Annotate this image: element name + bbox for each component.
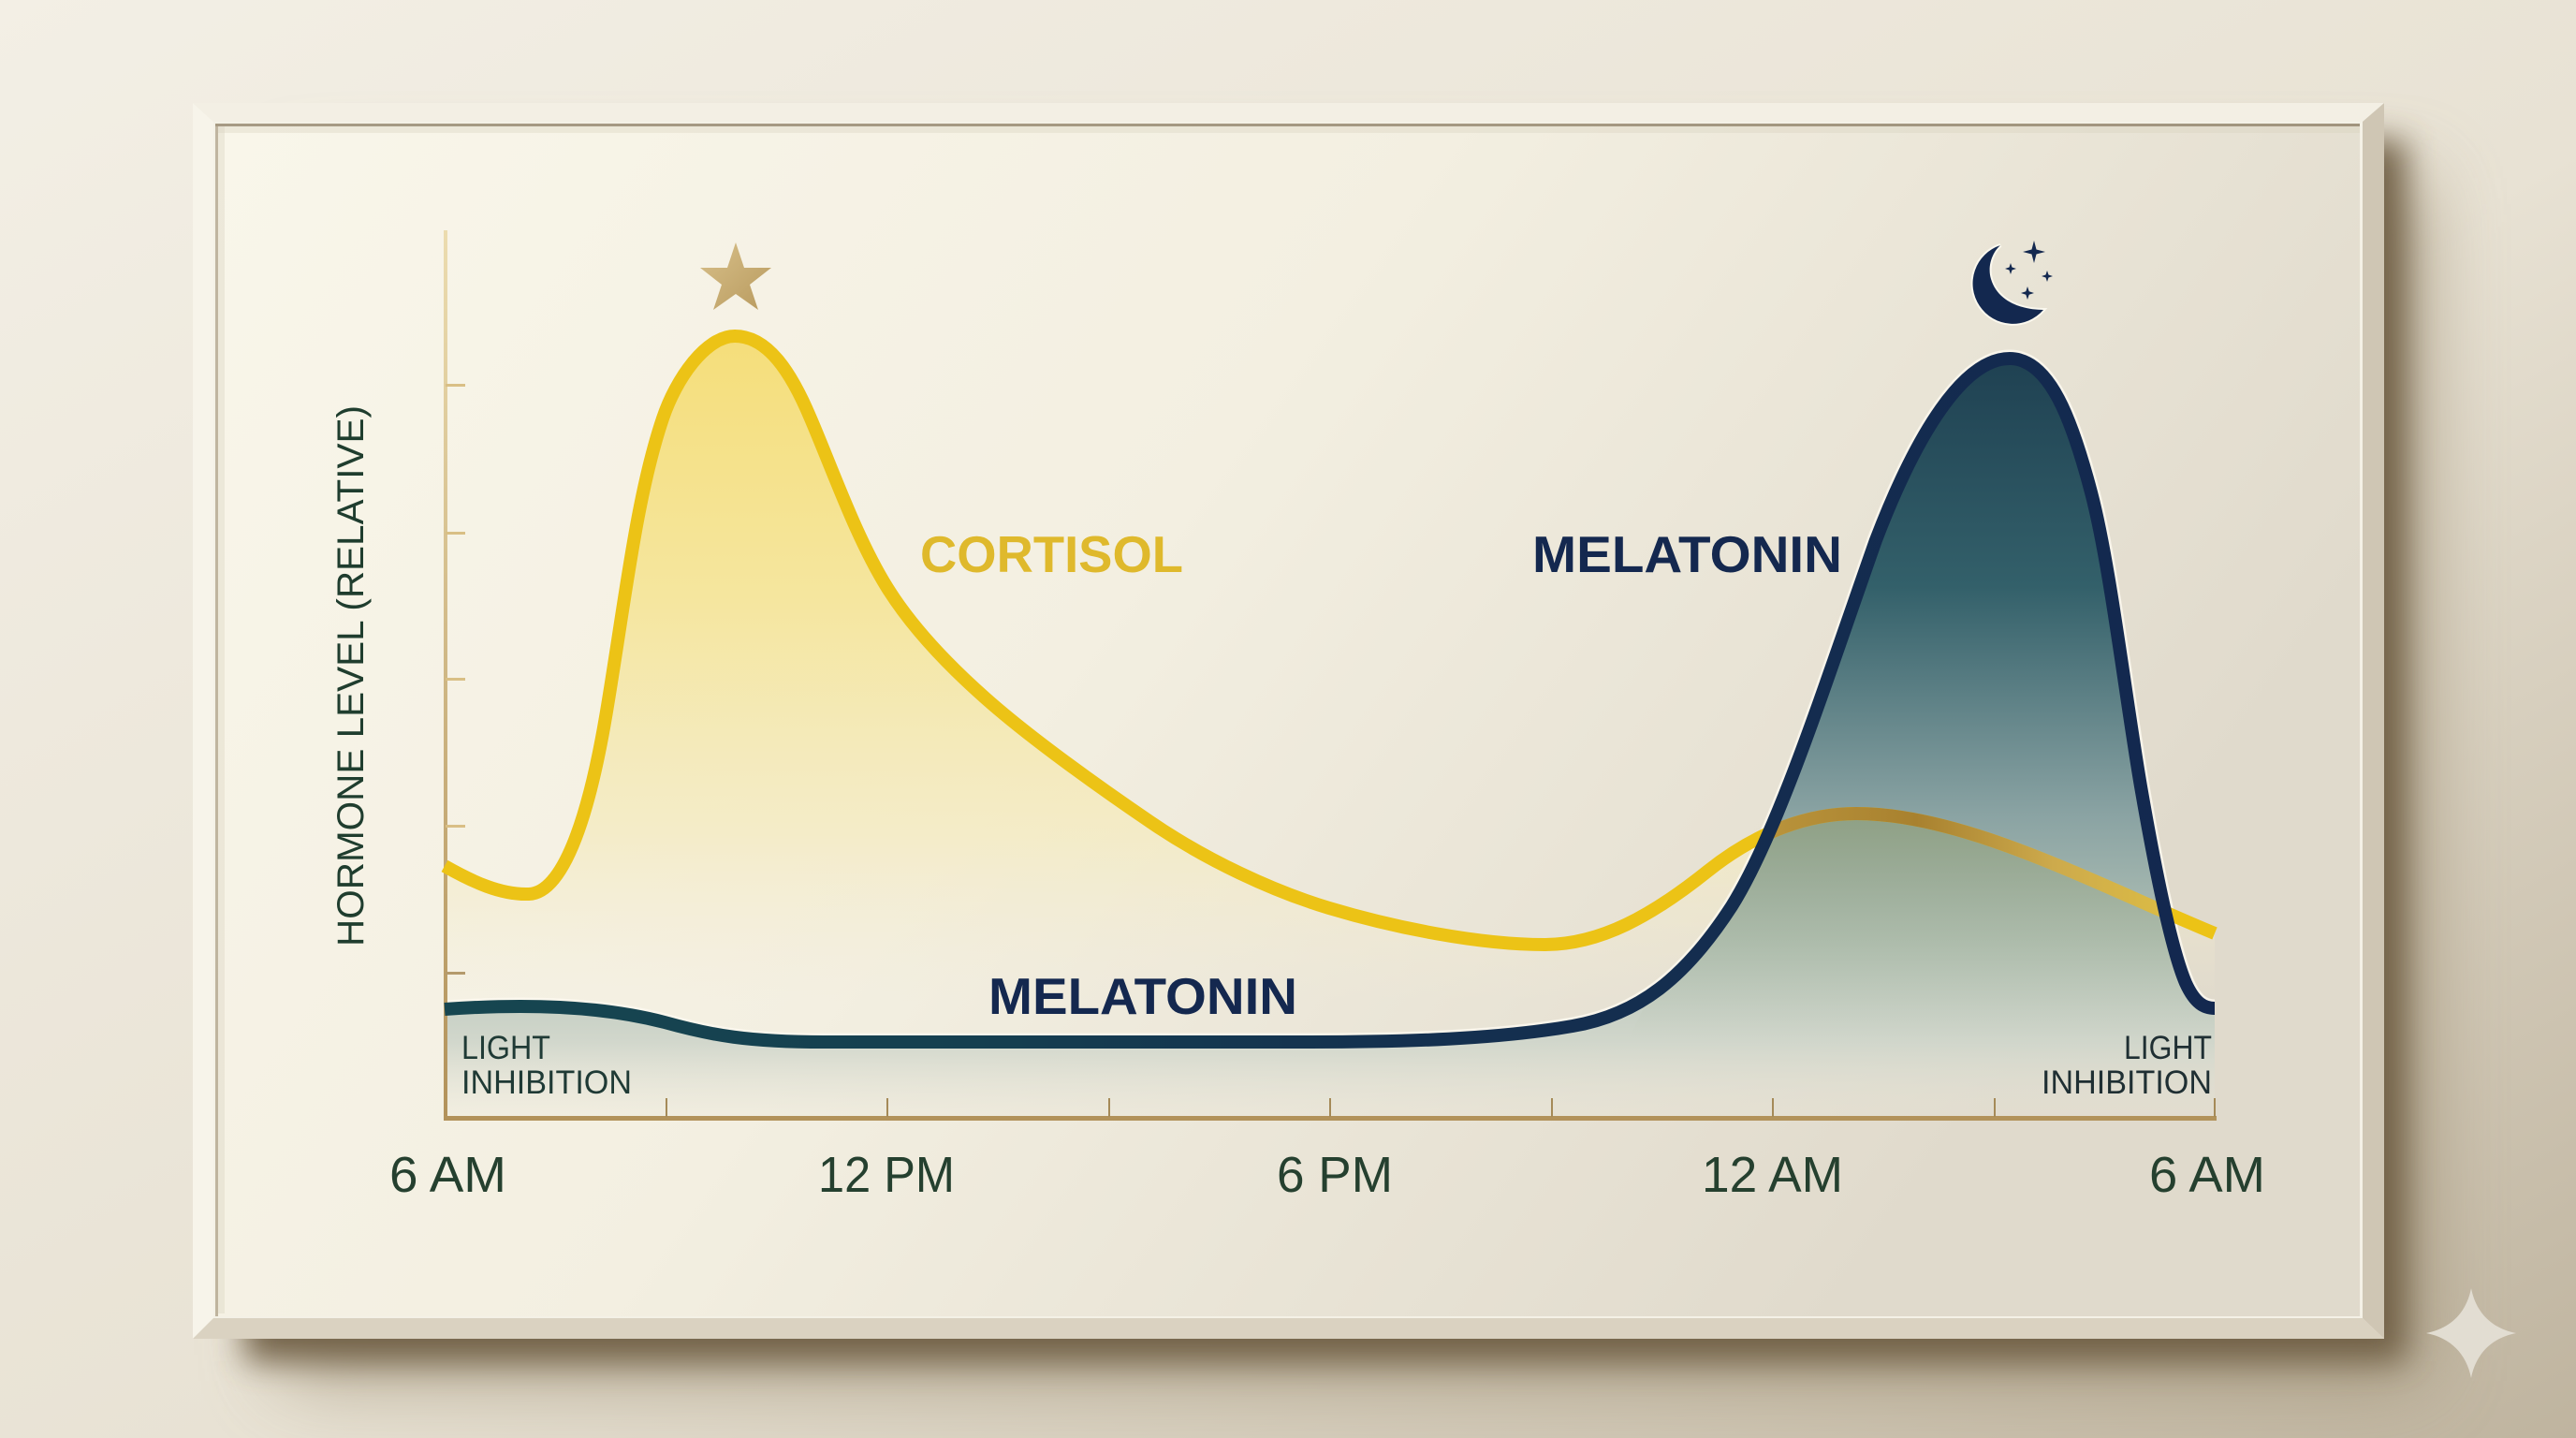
- label: cortisol: CORTISOL: [920, 525, 1183, 583]
- melatonin curve: [445, 359, 2215, 1042]
- melatonin area fill: [445, 359, 2215, 1119]
- label: melatonin baseline: MELATONIN: [988, 967, 1297, 1025]
- note: light inhibition left: INHIBITION: [461, 1064, 632, 1101]
- x axis time labels: 6 AM: [389, 1147, 506, 1203]
- icon: crescent moon with stars: [1973, 241, 2053, 324]
- icon: gold star: [700, 242, 771, 310]
- x axis time labels: 6 AM: [2149, 1147, 2265, 1203]
- note: light inhibition right: [2042, 1030, 2212, 1101]
- cortisol curve gold segment inside melatonin peak: [1773, 807, 2159, 917]
- x axis time labels: 12 AM: [1702, 1147, 1843, 1203]
- x axis time labels: 12 PM: [818, 1147, 955, 1203]
- cortisol area fill: [445, 336, 2215, 1119]
- picture frame: [193, 103, 2384, 1339]
- note: light inhibition left: LIGHT: [461, 1030, 550, 1066]
- note: light inhibition right: LIGHT: [2124, 1030, 2212, 1066]
- overlap area of cortisol and melatonin: [1698, 820, 2172, 962]
- note: light inhibition left: [461, 1030, 632, 1101]
- x axis time labels: [389, 1147, 2265, 1203]
- axes: [444, 230, 2217, 1121]
- y axis title: HORMONE LEVEL (RELATIVE): [330, 405, 372, 946]
- y axis ticks: [446, 384, 465, 975]
- label: melatonin peak: MELATONIN: [1532, 525, 1842, 583]
- melatonin curve halo: [445, 359, 2215, 1042]
- x axis ticks: [666, 1098, 2216, 1117]
- cortisol curve: [445, 336, 2215, 945]
- note: light inhibition right: INHIBITION: [2042, 1064, 2212, 1101]
- x axis time labels: 6 PM: [1277, 1147, 1393, 1203]
- icon: corner sparkle: [2426, 1288, 2516, 1378]
